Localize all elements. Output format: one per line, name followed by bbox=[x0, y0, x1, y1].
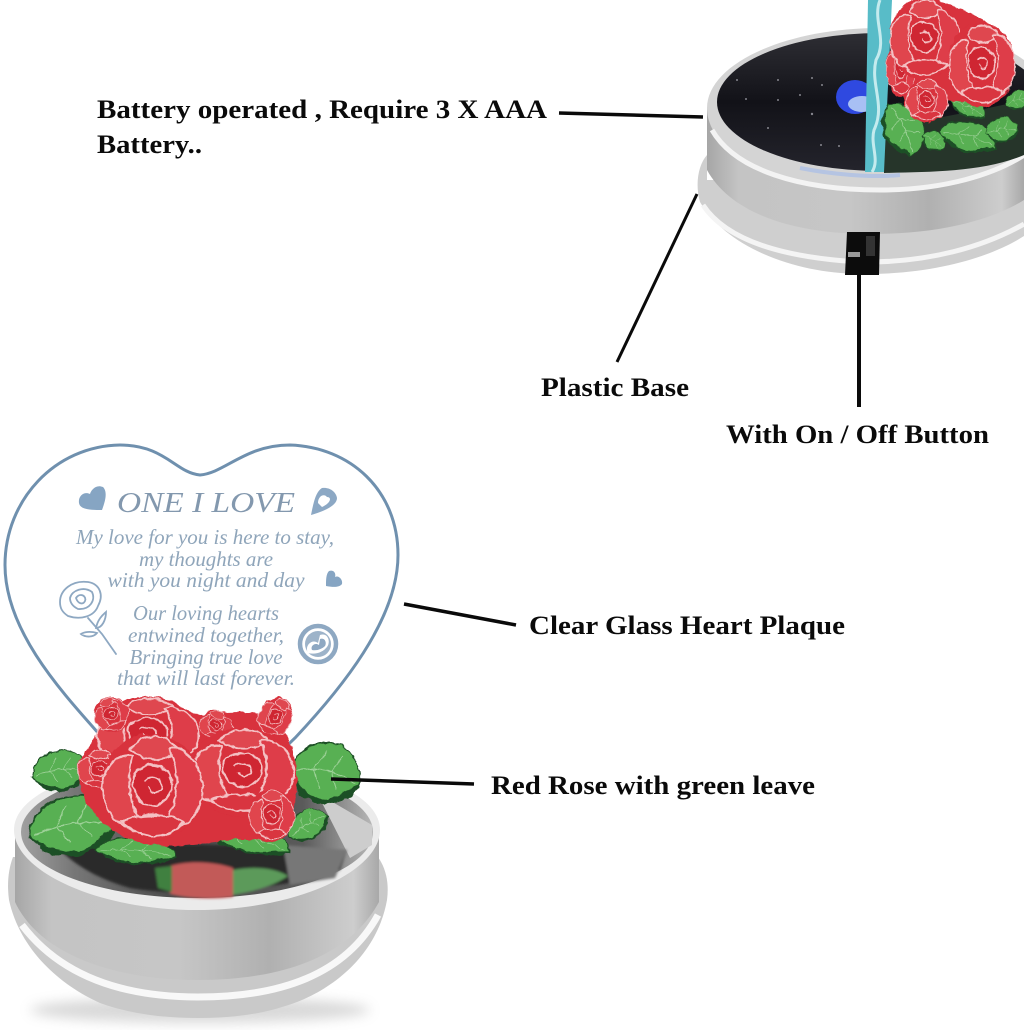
glass plaque edge bbox=[865, 0, 892, 172]
poem second verse: that will last forever. bbox=[117, 666, 295, 690]
heart outline bbox=[5, 445, 398, 830]
label: batteries bbox=[97, 95, 547, 159]
reflection of roses bbox=[60, 844, 347, 898]
arrow: battery leader bbox=[559, 113, 703, 117]
label: plastic base: Plastic Base bbox=[541, 373, 689, 402]
poem second verse: entwined together, bbox=[128, 623, 284, 647]
blue light core bbox=[848, 96, 876, 112]
sparkle dots bbox=[736, 77, 840, 147]
poem first verse: my thoughts are bbox=[139, 547, 273, 571]
base shadow bbox=[30, 997, 370, 1023]
roses bbox=[78, 692, 300, 846]
arrow: base leader bbox=[617, 194, 697, 362]
arrow: switch leader bbox=[857, 275, 861, 407]
lip highlight bbox=[22, 915, 378, 997]
poem first verse: My love for you is here to stay, bbox=[75, 525, 334, 549]
poem second verse: Our loving hearts bbox=[133, 601, 279, 625]
icon: small heart bbox=[326, 571, 342, 587]
mirror top bbox=[21, 766, 373, 898]
glass plaque swirl bbox=[872, 0, 881, 172]
base body bbox=[15, 830, 379, 980]
poem first verse bbox=[75, 525, 334, 592]
label: plaque: Clear Glass Heart Plaque bbox=[529, 611, 845, 640]
poem second verse: Bringing true love bbox=[130, 645, 282, 669]
icon: circled heart bbox=[300, 626, 336, 662]
base lower edge highlight bbox=[703, 205, 1024, 262]
panel: rose with base bbox=[8, 692, 388, 1023]
label: rose: Red Rose with green leave bbox=[491, 771, 815, 800]
label: batteries: Battery operated , Require 3 X AAA bbox=[97, 95, 547, 124]
blue light bbox=[836, 80, 874, 114]
label: batteries: Battery.. bbox=[97, 130, 202, 159]
heading: ONE I LOVE bbox=[117, 487, 295, 519]
dark mirror disc bbox=[717, 33, 1024, 171]
rim light edge bbox=[712, 130, 1024, 190]
leaves bbox=[23, 735, 368, 868]
panel: heart plaque bbox=[5, 445, 398, 830]
dark foliage base bbox=[884, 100, 1024, 173]
label: switch: With On / Off Button bbox=[726, 420, 990, 449]
base rim bbox=[707, 28, 1024, 192]
mirror highlight bbox=[317, 793, 372, 858]
poem first verse: with you night and day bbox=[108, 568, 305, 592]
panel: base with switch close-up bbox=[698, 0, 1024, 275]
base body bbox=[707, 108, 1024, 234]
poem second verse bbox=[117, 601, 295, 690]
roses bbox=[886, 0, 1015, 123]
on/off switch bbox=[845, 232, 880, 275]
icon: filled heart bbox=[79, 486, 106, 510]
base rim bbox=[14, 762, 380, 910]
leaves bbox=[872, 87, 1024, 163]
arrow: rose leader bbox=[331, 779, 474, 784]
rim blue glow bbox=[800, 168, 900, 176]
base lip bbox=[698, 155, 1024, 274]
icon: engraved rose bbox=[60, 582, 116, 654]
base lip bbox=[8, 857, 388, 1018]
icon: outline heart bbox=[311, 488, 337, 515]
arrow: plaque leader bbox=[404, 604, 516, 625]
